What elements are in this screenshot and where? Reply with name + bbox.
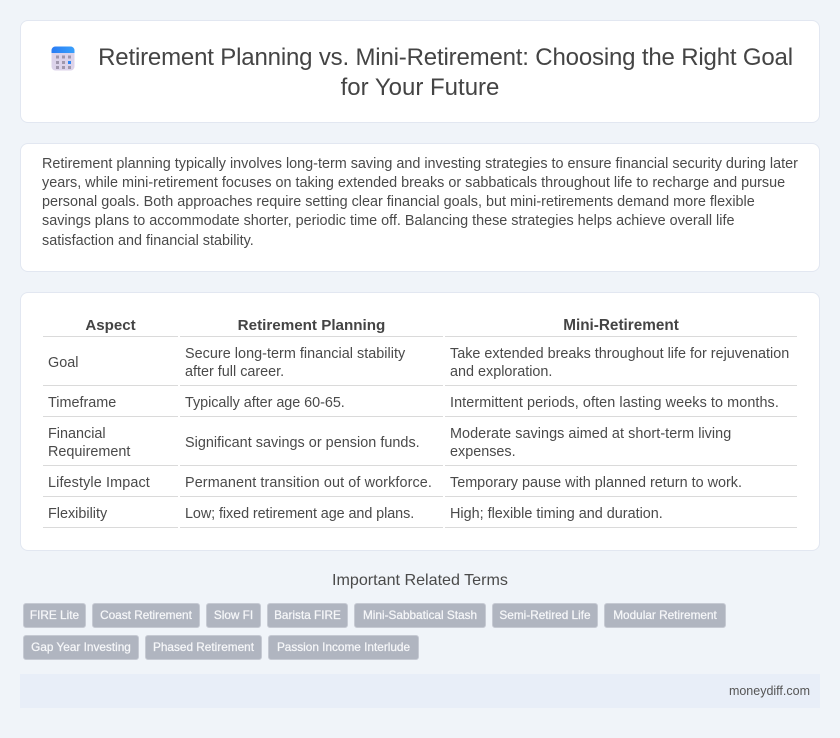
row: timeframe xyxy=(48,395,779,411)
panel: intro text: years, while mini-retirement focuses on taking extended breaks or sabbaticals throughout life to recharge and pursue xyxy=(42,175,785,191)
icon: calendar xyxy=(52,46,74,70)
title xyxy=(98,44,793,101)
row: financial requirement: Requirement xyxy=(48,444,130,460)
row: lifestyle impact: Lifestyle Impact xyxy=(48,475,150,491)
footer xyxy=(20,674,820,708)
tags: related terms: Modular Retirement xyxy=(613,608,717,622)
tags: related terms: FIRE Lite xyxy=(30,608,79,622)
row: timeframe: Typically after age 60-65. xyxy=(185,395,345,411)
tags: related terms: Slow FI xyxy=(214,608,253,622)
title: for Your Future xyxy=(341,74,499,101)
row: flexibility: Low; fixed retirement age and plans. xyxy=(185,506,414,522)
row: flexibility: Flexibility xyxy=(48,506,107,522)
panel: intro text xyxy=(20,143,820,272)
row: flexibility xyxy=(48,506,663,522)
row: financial requirement: Financial xyxy=(48,426,106,442)
row: goal: Goal xyxy=(48,355,78,371)
heading: related terms: Important Related Terms xyxy=(332,571,508,589)
row: goal: and exploration. xyxy=(450,364,552,380)
panel: intro text: savings plans to accommodate shorter, periodic time off. Balancing these strategies helps achieve overall life xyxy=(42,213,734,229)
row: goal: Secure long-term financial stability xyxy=(185,346,405,362)
tags: related terms: Passion Income Interlude xyxy=(277,640,410,654)
table header: Retirement Planning xyxy=(238,317,385,334)
row: financial requirement: Moderate savings aimed at short-term living xyxy=(450,426,731,442)
tags: related terms: Barista FIRE xyxy=(274,608,341,622)
row: lifestyle impact: Permanent transition out of workforce. xyxy=(185,475,432,491)
row: financial requirement: expenses. xyxy=(450,444,516,460)
tags: related terms xyxy=(23,603,726,660)
row: financial requirement: Significant savings or pension funds. xyxy=(185,435,420,451)
table header: Aspect xyxy=(85,317,136,334)
row: goal: after full career. xyxy=(185,364,284,380)
tags: related terms: Semi-Retired Life xyxy=(499,608,591,622)
tags: related terms: Mini-Sabbatical Stash xyxy=(363,608,477,622)
panel: header xyxy=(20,20,820,123)
row: goal xyxy=(48,346,789,380)
row: timeframe: Intermittent periods, often lasting weeks to months. xyxy=(450,395,779,411)
row: lifestyle impact xyxy=(48,475,742,491)
footer: moneydiff.com xyxy=(729,684,810,698)
row: flexibility: High; flexible timing and duration. xyxy=(450,506,663,522)
row: financial requirement xyxy=(48,426,731,460)
tags: related terms: Gap Year Investing xyxy=(31,640,131,654)
title: Retirement Planning vs. Mini-Retirement: Choosing the Right Goal xyxy=(98,44,793,71)
row: lifestyle impact: Temporary pause with planned return to work. xyxy=(450,475,742,491)
panel: intro text: satisfaction and financial stability. xyxy=(42,233,254,249)
panel: intro text: Retirement planning typically involves long-term saving and investing strategies to ensure financial security during later xyxy=(42,156,798,172)
panel: comparison table xyxy=(20,292,820,551)
tags: related terms: Coast Retirement xyxy=(100,608,192,622)
panel: intro text: personal goals. Both approaches require setting clear financial goals, but mini-retirements demand more flexible xyxy=(42,194,755,210)
table header: Mini-Retirement xyxy=(563,317,679,334)
table header xyxy=(85,317,679,334)
tags: related terms: Phased Retirement xyxy=(153,640,254,654)
row: goal: Take extended breaks throughout life for rejuvenation xyxy=(450,346,789,362)
row: timeframe: Timeframe xyxy=(48,395,116,411)
